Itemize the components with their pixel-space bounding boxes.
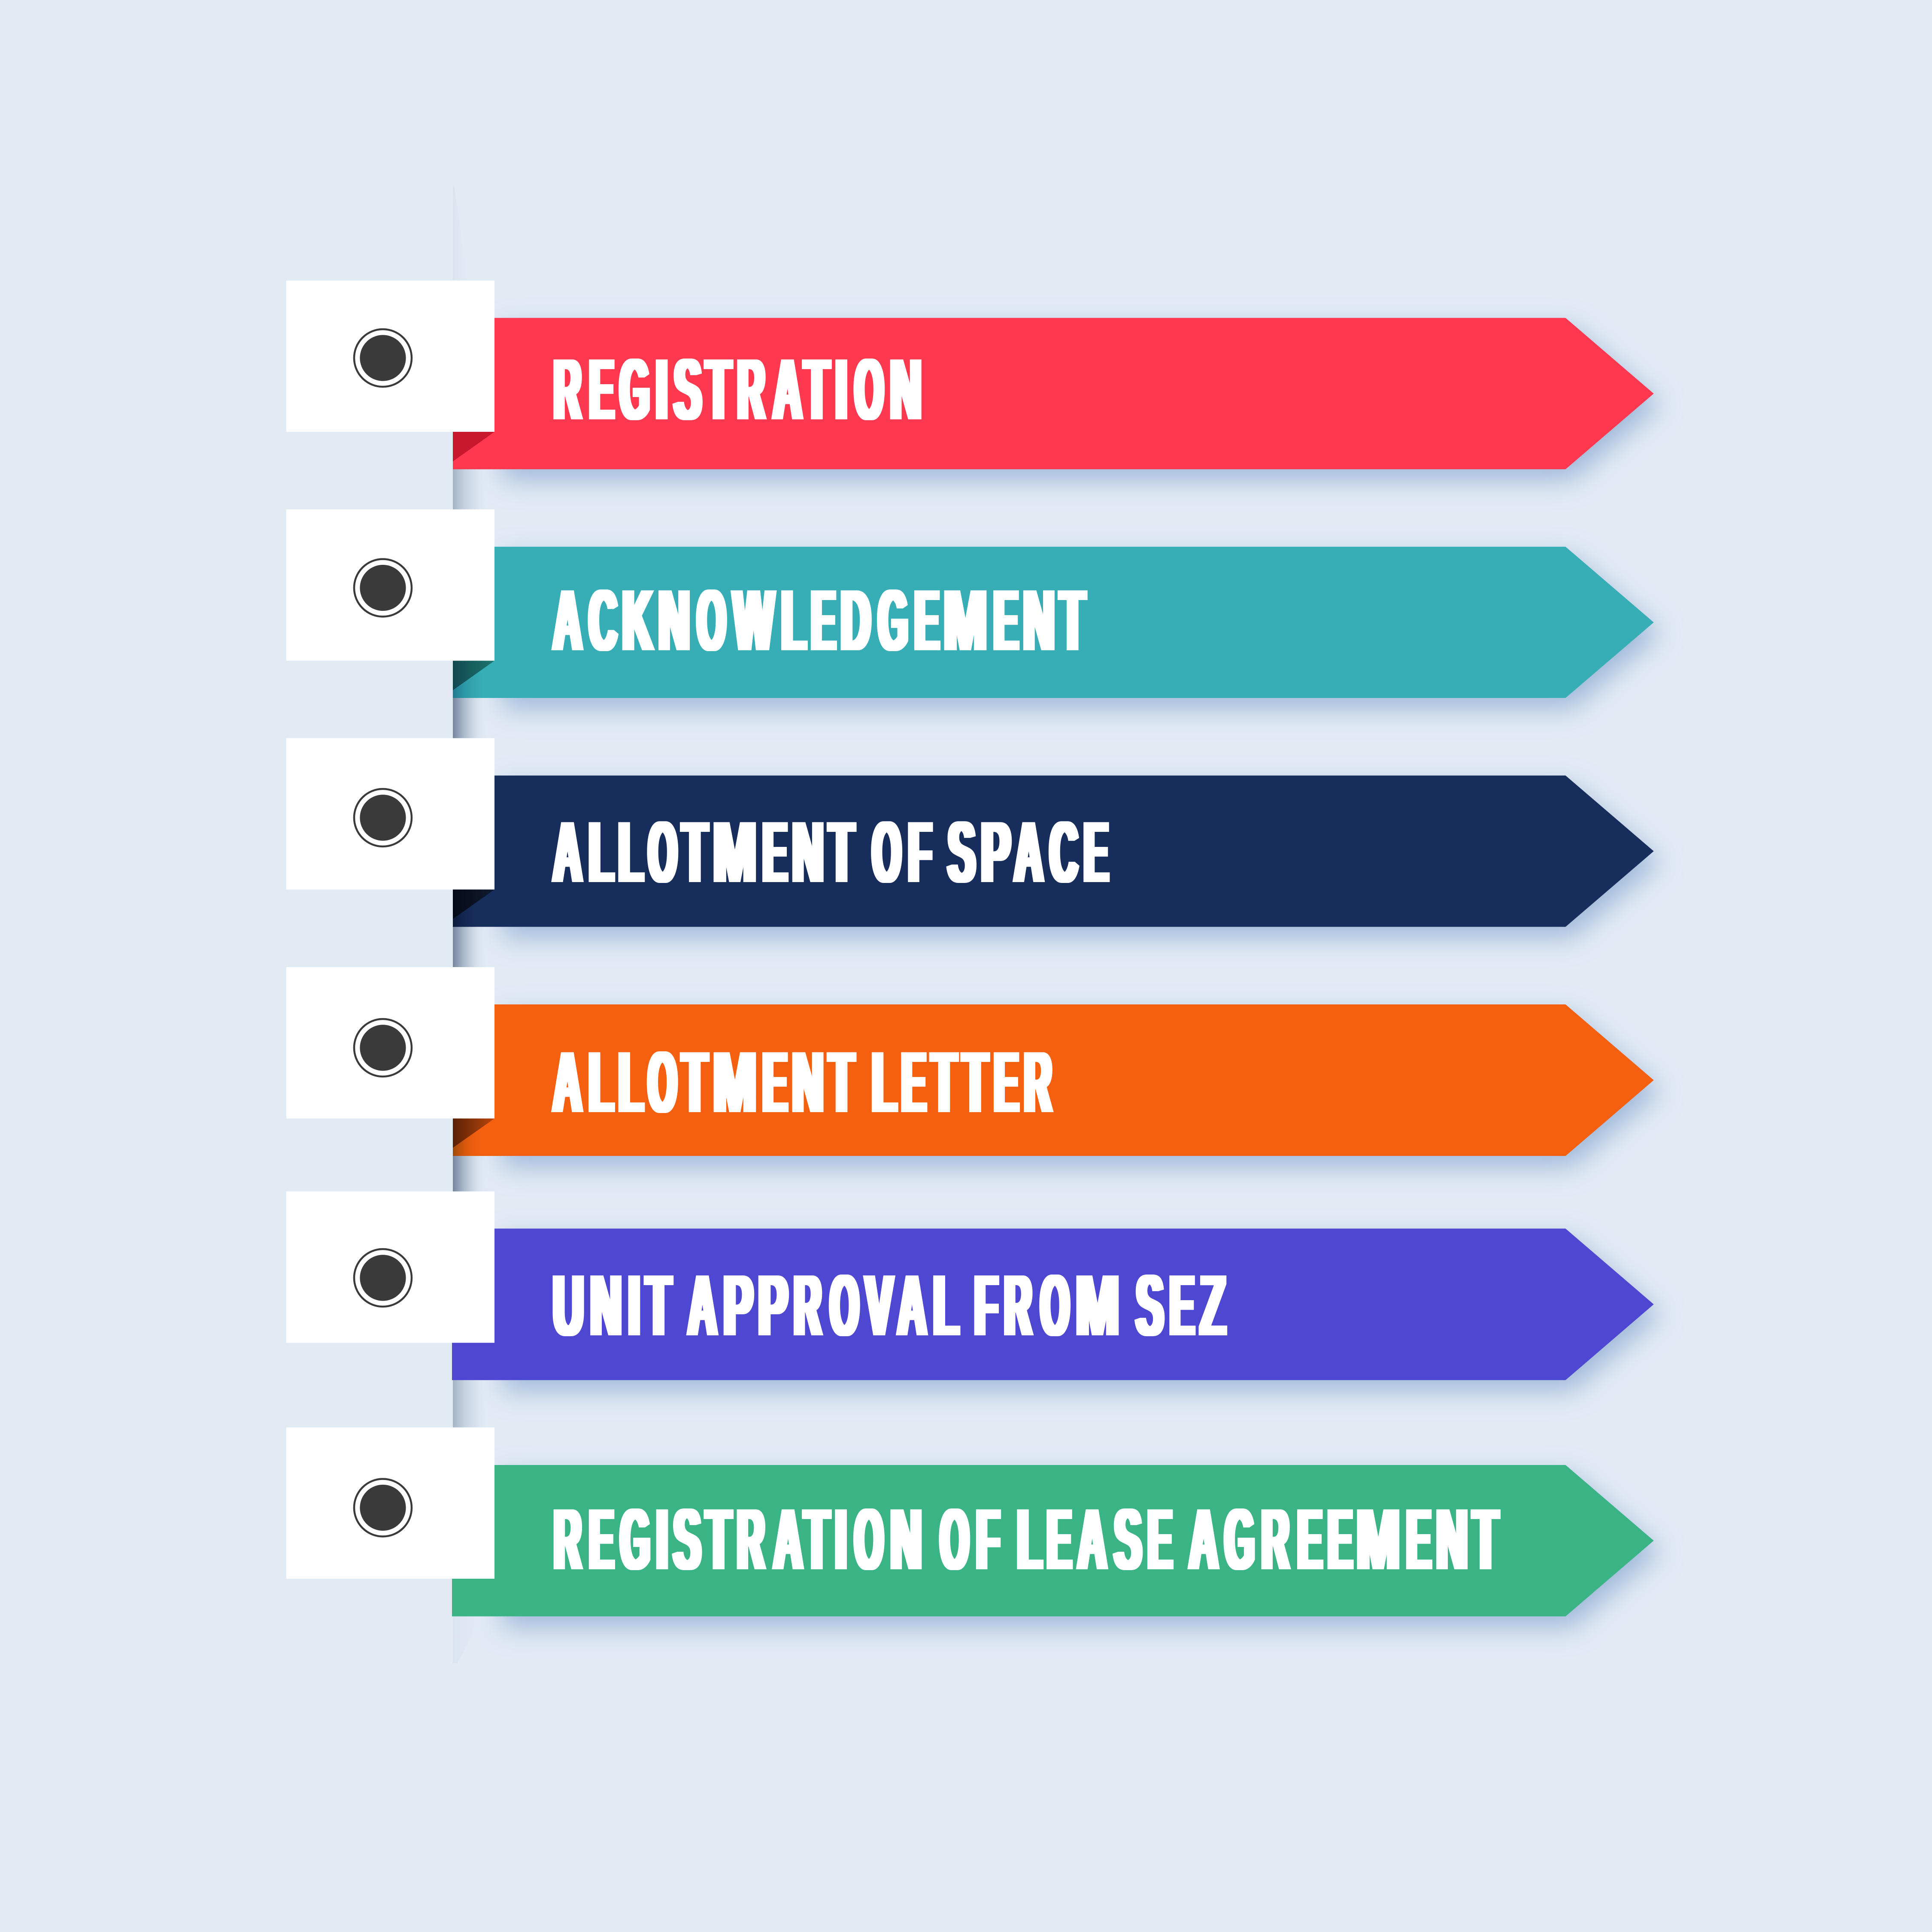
label 3: A xyxy=(553,804,582,901)
label 1: T xyxy=(706,341,731,438)
label 1: G xyxy=(620,341,649,438)
label 3: T xyxy=(682,804,707,901)
arrow shadow 5 xyxy=(502,1239,1660,1391)
label 2: K xyxy=(622,572,652,669)
spine shadow 5 xyxy=(453,1380,487,1428)
step 3: allotment of space: E xyxy=(1084,804,1108,901)
label 6: M xyxy=(1356,1491,1400,1588)
label 6: O xyxy=(855,1491,883,1588)
label 2: L xyxy=(782,572,806,669)
label 4: T xyxy=(829,1034,854,1131)
label 2: O xyxy=(697,572,725,669)
label 4: L xyxy=(872,1034,897,1131)
label 6: E xyxy=(1407,1491,1431,1588)
spine shadow 1 xyxy=(453,469,487,510)
label 2: E xyxy=(915,572,939,669)
step 4: allotment letter xyxy=(286,967,1660,1192)
label 5: U xyxy=(553,1257,584,1354)
label 6: O xyxy=(940,1491,969,1588)
label 5: R xyxy=(794,1257,821,1354)
label 3: N xyxy=(792,804,823,901)
label 2: G xyxy=(878,572,908,669)
label 2: D xyxy=(841,572,870,669)
label 3: P xyxy=(981,804,1010,901)
label 6: E xyxy=(1148,1491,1172,1588)
arrow banner 1 xyxy=(453,318,1654,469)
arrow shadow 1 xyxy=(502,328,1660,480)
white card 6 xyxy=(286,1427,494,1579)
spine shadow 4 xyxy=(453,1156,487,1192)
label 5: V xyxy=(866,1257,893,1354)
label 6: A xyxy=(774,1491,802,1588)
label 3: S xyxy=(948,804,975,901)
label 6: I xyxy=(656,1491,668,1588)
step 1: registration xyxy=(286,281,1660,510)
label 6: R xyxy=(1262,1491,1289,1588)
label 3: F xyxy=(908,804,931,901)
label 5: M xyxy=(1076,1257,1119,1354)
label 5: P xyxy=(758,1257,788,1354)
label 3: C xyxy=(1050,804,1077,901)
label 2: M xyxy=(943,572,987,669)
label 4: T xyxy=(963,1034,988,1131)
label 5: O xyxy=(830,1257,858,1354)
step 4: allotment letter: R xyxy=(1024,1034,1052,1131)
label 3: A xyxy=(1014,804,1043,901)
label 1: R xyxy=(554,341,581,438)
step 3: allotment of space xyxy=(286,738,1660,967)
label 1: R xyxy=(737,341,765,438)
white card 3 xyxy=(286,738,494,889)
step 6: registration of lease agreement xyxy=(286,1427,1660,1663)
bullet 3 xyxy=(354,789,412,846)
label 3: M xyxy=(713,804,756,901)
white card 2 xyxy=(286,510,494,661)
label 4: N xyxy=(792,1034,823,1131)
banner edge shade 2 xyxy=(453,661,487,698)
label 5: T xyxy=(646,1257,671,1354)
label 6: R xyxy=(554,1491,581,1588)
label 5: E xyxy=(1170,1257,1194,1354)
label 5: R xyxy=(1004,1257,1031,1354)
label 1: A xyxy=(773,341,802,438)
label 2: E xyxy=(811,572,835,669)
label 6: R xyxy=(737,1491,764,1588)
label 6: T xyxy=(804,1491,829,1588)
label 3: O xyxy=(649,804,677,901)
step 2: acknowledgement: T xyxy=(1060,572,1085,669)
banner edge shade 4 xyxy=(453,1118,483,1156)
label 6: A xyxy=(1189,1491,1218,1588)
label 4: T xyxy=(931,1034,956,1131)
label 4: O xyxy=(648,1034,676,1131)
label 6: E xyxy=(589,1491,613,1588)
bullet 2 xyxy=(354,559,412,616)
label 4: E xyxy=(994,1034,1018,1131)
arrow banner 6 xyxy=(452,1465,1654,1617)
label 3: L xyxy=(619,804,643,901)
label 6: E xyxy=(1328,1491,1352,1588)
step 1: registration: N xyxy=(890,341,921,438)
label 2: E xyxy=(994,572,1018,669)
label 5: S xyxy=(1136,1257,1163,1354)
arrow shadow 2 xyxy=(502,557,1660,709)
fold 4 xyxy=(453,1119,494,1148)
label 3: L xyxy=(589,804,613,901)
label 6: T xyxy=(706,1491,731,1588)
label 6: S xyxy=(673,1491,701,1588)
label 6: N xyxy=(891,1491,922,1588)
label 6: N xyxy=(1436,1491,1468,1588)
arrow banner 3 xyxy=(453,776,1654,927)
white card 5 xyxy=(286,1192,494,1343)
spine shadow 2 xyxy=(453,698,487,738)
label 1: T xyxy=(804,341,829,438)
label 2: C xyxy=(589,572,617,669)
bullet 1 xyxy=(354,329,412,387)
bullet 6 xyxy=(354,1479,412,1537)
bullet 5 xyxy=(354,1249,412,1307)
label 5: L xyxy=(934,1257,958,1354)
label 1: E xyxy=(590,341,614,438)
label 4: L xyxy=(619,1034,643,1131)
label 5: A xyxy=(688,1257,717,1354)
label 4: E xyxy=(902,1034,926,1131)
label 1: S xyxy=(674,341,701,438)
label 6: L xyxy=(1017,1491,1042,1588)
arrow shadow 3 xyxy=(502,786,1660,937)
spine shadow above first card xyxy=(453,186,468,280)
spine shadow 6 xyxy=(453,1616,483,1663)
label 6: G xyxy=(621,1491,650,1588)
spine shadow 3 xyxy=(453,927,487,967)
step 5: unit approval from sez xyxy=(286,1192,1660,1428)
banner edge shade 3 xyxy=(453,889,479,927)
label 5: P xyxy=(724,1257,753,1354)
label 1: I xyxy=(836,341,847,438)
label 3: T xyxy=(829,804,854,901)
label 4: M xyxy=(713,1034,756,1131)
label 5: N xyxy=(591,1257,622,1354)
label 5: I xyxy=(628,1257,640,1354)
label 6: I xyxy=(835,1491,846,1588)
label 3: E xyxy=(763,804,787,901)
bullet 4 xyxy=(354,1019,412,1077)
label 6: G xyxy=(1225,1491,1254,1588)
label 6: S xyxy=(1114,1491,1141,1588)
label 2: N xyxy=(658,572,690,669)
label 5: O xyxy=(1041,1257,1069,1354)
label 6: F xyxy=(977,1491,999,1588)
label 4: E xyxy=(763,1034,787,1131)
label 4: T xyxy=(682,1034,707,1131)
label 5: F xyxy=(975,1257,998,1354)
step 6: registration of lease agreement: T xyxy=(1473,1491,1498,1588)
arrow shadow 6 xyxy=(502,1476,1660,1627)
label 6: E xyxy=(1298,1491,1322,1588)
label 6: A xyxy=(1078,1491,1107,1588)
label 6: E xyxy=(1047,1491,1071,1588)
arrow banner 2 xyxy=(453,547,1654,698)
label 1: I xyxy=(656,341,667,438)
arrow banner 4 xyxy=(453,1004,1654,1156)
label 3: O xyxy=(873,804,901,901)
white card 4 xyxy=(286,967,494,1119)
label 2: W xyxy=(734,572,774,669)
arrow banner 5 xyxy=(452,1228,1654,1380)
fold 2 xyxy=(453,661,494,690)
label 1: O xyxy=(855,341,883,438)
label 2: A xyxy=(553,572,582,669)
arrow shadow 4 xyxy=(502,1015,1660,1167)
white card 1 xyxy=(286,281,494,432)
label 4: L xyxy=(589,1034,613,1131)
step 2: acknowledgement xyxy=(286,510,1660,738)
label 4: A xyxy=(553,1034,582,1131)
label 2: N xyxy=(1023,572,1055,669)
step 5: unit approval from sez: Z xyxy=(1201,1257,1225,1354)
label 5: A xyxy=(898,1257,926,1354)
fold 1 xyxy=(453,432,494,461)
fold 3 xyxy=(453,889,494,919)
